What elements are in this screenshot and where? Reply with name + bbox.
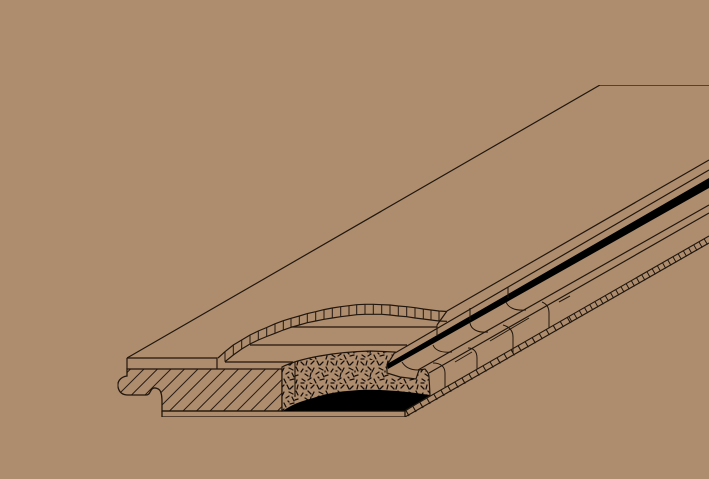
tongue channel cross lines	[402, 287, 570, 387]
hatched core section with tongue profile	[118, 369, 282, 411]
side ribbed strip	[405, 236, 709, 417]
cork core	[282, 349, 432, 411]
top surface of plank	[127, 85, 709, 369]
ribbed arc layer	[218, 304, 447, 362]
black lower core	[283, 390, 430, 411]
base layer	[162, 410, 405, 417]
black groove band	[387, 178, 709, 369]
drawing	[118, 85, 709, 417]
long edge lines	[395, 170, 709, 373]
illustration: floor plank cutaway	[118, 85, 709, 417]
